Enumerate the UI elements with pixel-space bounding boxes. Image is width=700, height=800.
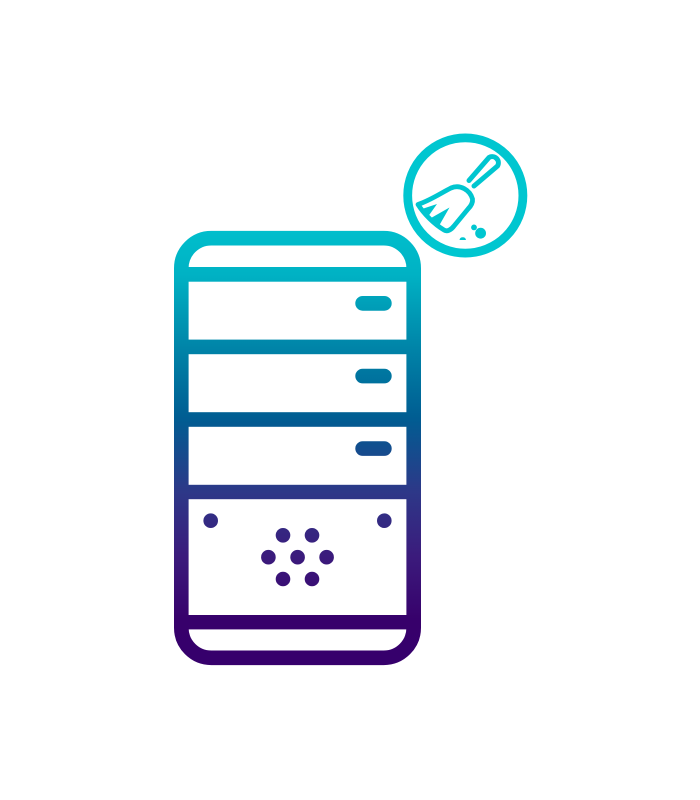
speaker and screw dots <box>203 513 392 586</box>
drive bay buttons <box>355 296 392 456</box>
badge ring <box>408 138 523 253</box>
tower casing <box>181 238 414 658</box>
broom handle <box>469 157 498 186</box>
broom head <box>418 187 473 231</box>
broom bristles <box>422 204 450 225</box>
icon: cleaning broom badge <box>408 138 523 253</box>
icon: computer tower <box>181 238 414 658</box>
dust particles <box>460 224 486 240</box>
shelf dividers <box>181 267 414 629</box>
